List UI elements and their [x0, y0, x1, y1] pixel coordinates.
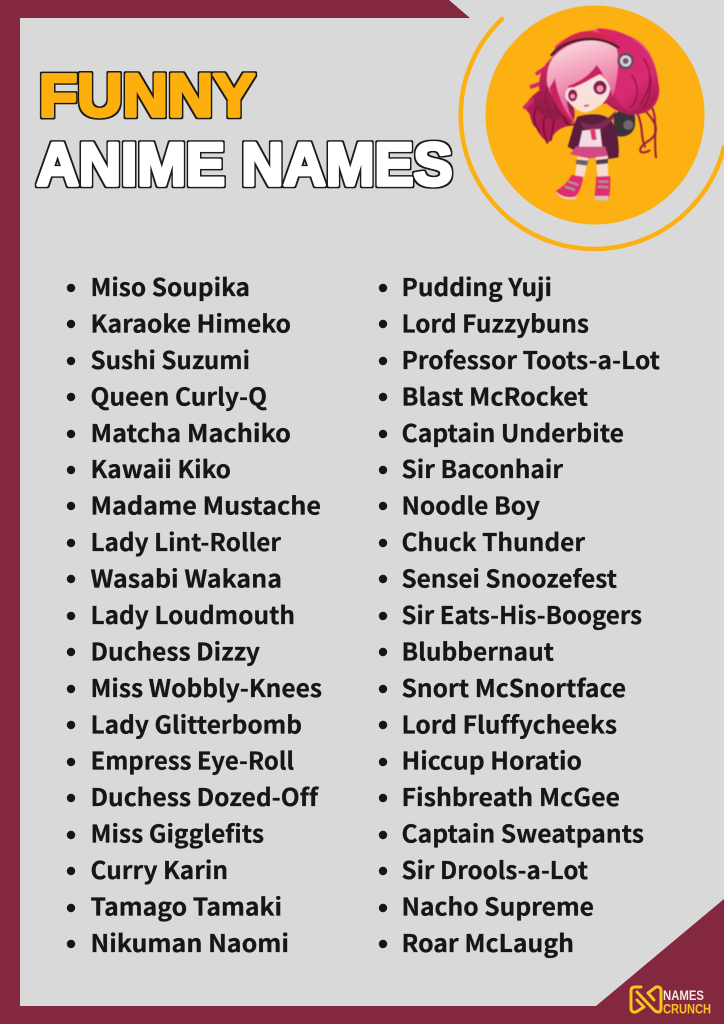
names list: right column: [379, 268, 660, 959]
names list: right column: Lord Fluffycheeks: [402, 705, 617, 740]
names list: right column: Sir Baconhair: [402, 450, 564, 485]
names list: left column: Matcha Machiko: [90, 414, 291, 449]
names list: left column: Duchess Dizzy: [90, 632, 260, 667]
face: [566, 70, 611, 113]
skirt: [570, 147, 608, 158]
eyes: [589, 79, 609, 96]
names list: right column: Roar McLaugh: [402, 924, 574, 959]
fringe strand: [568, 65, 603, 89]
names list: right column: Captain Sweatpants: [402, 815, 644, 850]
names list: right column: Captain Underbite: [402, 414, 624, 449]
red hood top: [555, 31, 618, 50]
decorative ring arc: [461, 19, 724, 249]
names list: left column: Nikuman Naomi: [90, 924, 289, 959]
names list: left column: Wasabi Wakana: [90, 560, 282, 594]
logo text: crunch: CRUNCH: [663, 1002, 711, 1016]
back hair mass: [534, 29, 659, 120]
yellow character circle: [486, 6, 704, 224]
loose hair strands on the left: [525, 63, 577, 143]
mouth: [584, 103, 589, 108]
names list: left column: Miso Soupika: [90, 268, 250, 303]
names list: left column: Miss Wobbly-Knees: [90, 669, 322, 704]
loose hair strands on the right: [637, 105, 656, 157]
icon: N logo mark: [631, 987, 661, 1012]
names list: left column: [67, 268, 322, 959]
names list: left column: Curry Karin: [90, 851, 228, 886]
names list: left column: Lady Glitterbomb: [90, 705, 302, 740]
names list: right column: Blubbernaut: [402, 632, 554, 667]
jacket: [568, 114, 619, 159]
side hair lock: [549, 78, 576, 124]
names list: left column: Queen Curly-Q: [90, 377, 267, 412]
front hair: [547, 40, 618, 124]
title: [36, 62, 452, 198]
legs: [575, 157, 588, 178]
names list: left column: Empress Eye-Roll: [90, 742, 294, 777]
logo: names crunch: [631, 987, 711, 1016]
names list: right column: Blast McRocket: [402, 377, 588, 412]
names list: left column: Lady Loudmouth: [90, 596, 295, 631]
names list: left column: Kawaii Kiko: [90, 450, 231, 485]
names list: right column: Pudding Yuji: [402, 268, 552, 303]
names list: right column: Sir Eats-His-Boogers: [402, 596, 642, 631]
hair strand shading: [545, 58, 651, 117]
names list: right column: Lord Fuzzybuns: [402, 304, 589, 339]
names list: right column: Snort McSnortface: [402, 669, 626, 704]
names list: left column: Tamago Tamaki: [90, 888, 282, 922]
names list: left column: Karaoke Himeko: [90, 304, 291, 339]
backpack: [613, 109, 635, 137]
names list: right column: Sensei Snoozefest: [402, 560, 617, 594]
names list: left column: Lady Lint-Roller: [90, 523, 282, 558]
names list: right column: Noodle Boy: [402, 487, 540, 522]
title line: anime names: ANIME NAMES: [36, 131, 452, 198]
names list: right column: Professor Toots-a-Lot: [402, 341, 660, 376]
shirt: [578, 129, 602, 148]
bullets: [379, 284, 387, 948]
names list: right column: Nacho Supreme: [402, 888, 594, 922]
names list: left column: Madame Mustache: [90, 487, 321, 522]
headphone: [617, 53, 634, 69]
names list: right column: Fishbreath McGee: [402, 778, 620, 813]
hood collar: [580, 111, 616, 132]
names list: left column: Miss Gigglefits: [90, 815, 264, 850]
lower left hair mass: [526, 87, 575, 142]
names list: right column: Chuck Thunder: [402, 523, 586, 558]
names list: left column: Sushi Suzumi: [90, 341, 250, 376]
title line: funny: FUNNY: [39, 62, 255, 129]
icon: chibi anime girl with pink hair: [525, 28, 659, 200]
names list: left column: Duchess Dozed-Off: [90, 778, 319, 813]
logo text: names: NAMES: [663, 988, 704, 1003]
shoes: [556, 175, 583, 199]
names list: right column: Hiccup Horatio: [402, 742, 582, 777]
bullets: [67, 284, 75, 948]
headband: [552, 39, 618, 55]
names list: right column: Sir Drools-a-Lot: [402, 851, 588, 886]
